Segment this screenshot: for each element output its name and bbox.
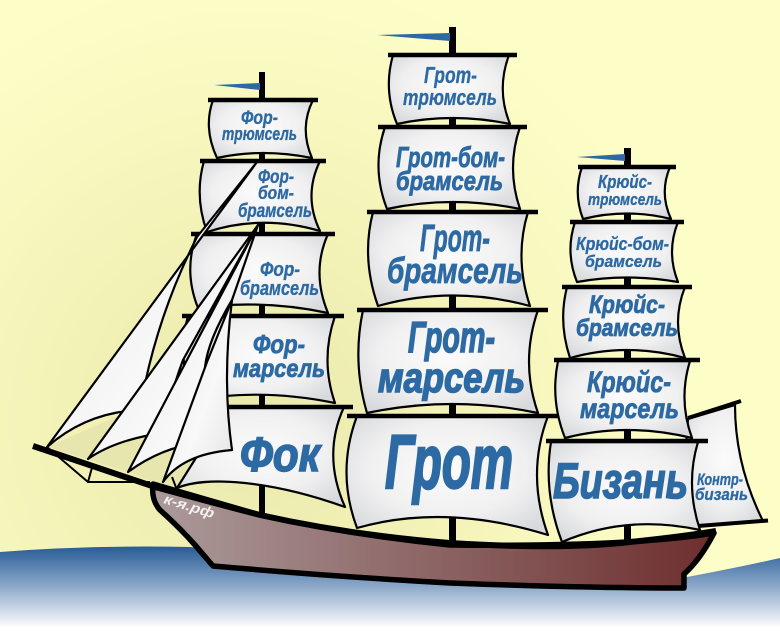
bowsprit stays [47, 447, 177, 490]
labels: mizzen mast [553, 172, 748, 509]
sea [0, 547, 780, 633]
labels: fore mast: Фор- [260, 259, 300, 281]
main mast sails [346, 55, 559, 535]
labels: mizzen mast: марсель [580, 393, 679, 424]
labels: main mast: трюмсель [403, 85, 497, 110]
jib sails [47, 162, 258, 482]
contra-mizzen sail [686, 401, 768, 526]
flag: main [377, 33, 450, 41]
watermark: к-я.рф [162, 491, 217, 521]
labels: mizzen mast: брамсель [585, 252, 662, 271]
labels: fore mast: Фок [240, 429, 322, 482]
labels: fore mast: Фор- [253, 329, 305, 359]
labels: mizzen mast: Контр- [697, 470, 743, 489]
labels: fore mast: брамсель [240, 278, 319, 300]
labels: mizzen mast: брамсель [576, 315, 678, 342]
labels: mizzen mast: бизань [695, 485, 748, 504]
labels: fore mast [222, 108, 325, 482]
bow rigging tint [47, 416, 232, 490]
labels: fore mast: Фор- [241, 108, 278, 129]
labels: main mast: брамсель [387, 250, 523, 291]
labels: main mast [378, 62, 525, 505]
labels: main mast: Грот- [408, 313, 495, 362]
labels: fore mast: бом- [258, 183, 294, 203]
fore mast sails [177, 100, 353, 507]
labels: mizzen mast: трюмсель [588, 190, 662, 209]
labels: fore mast: марсель [233, 355, 325, 383]
labels: mizzen mast: Крюйс-бом- [576, 234, 669, 254]
labels: mizzen mast: Бизань [553, 453, 688, 509]
hull [33, 446, 716, 588]
labels: fore mast: брамсель [238, 201, 312, 222]
labels: fore mast: Фор- [258, 167, 294, 188]
labels: fore mast: трюмсель [222, 124, 297, 144]
labels: mizzen mast: Крюйс- [589, 291, 665, 319]
labels: main mast: Грот- [420, 218, 490, 260]
masts [259, 27, 631, 547]
mizzen mast sails [546, 167, 708, 542]
flag: mizzen [577, 154, 625, 161]
labels: mizzen mast: Крюйс- [587, 366, 671, 399]
labels: main mast: Грот [385, 420, 513, 505]
labels: main mast: марсель [378, 354, 525, 401]
labels: main mast: Грот- [424, 62, 477, 88]
labels: main mast: Грот-бом- [396, 142, 505, 174]
labels: mizzen mast: Крюйс- [598, 172, 652, 192]
flag: fore [214, 83, 260, 90]
labels: main mast: брамсель [396, 166, 503, 196]
